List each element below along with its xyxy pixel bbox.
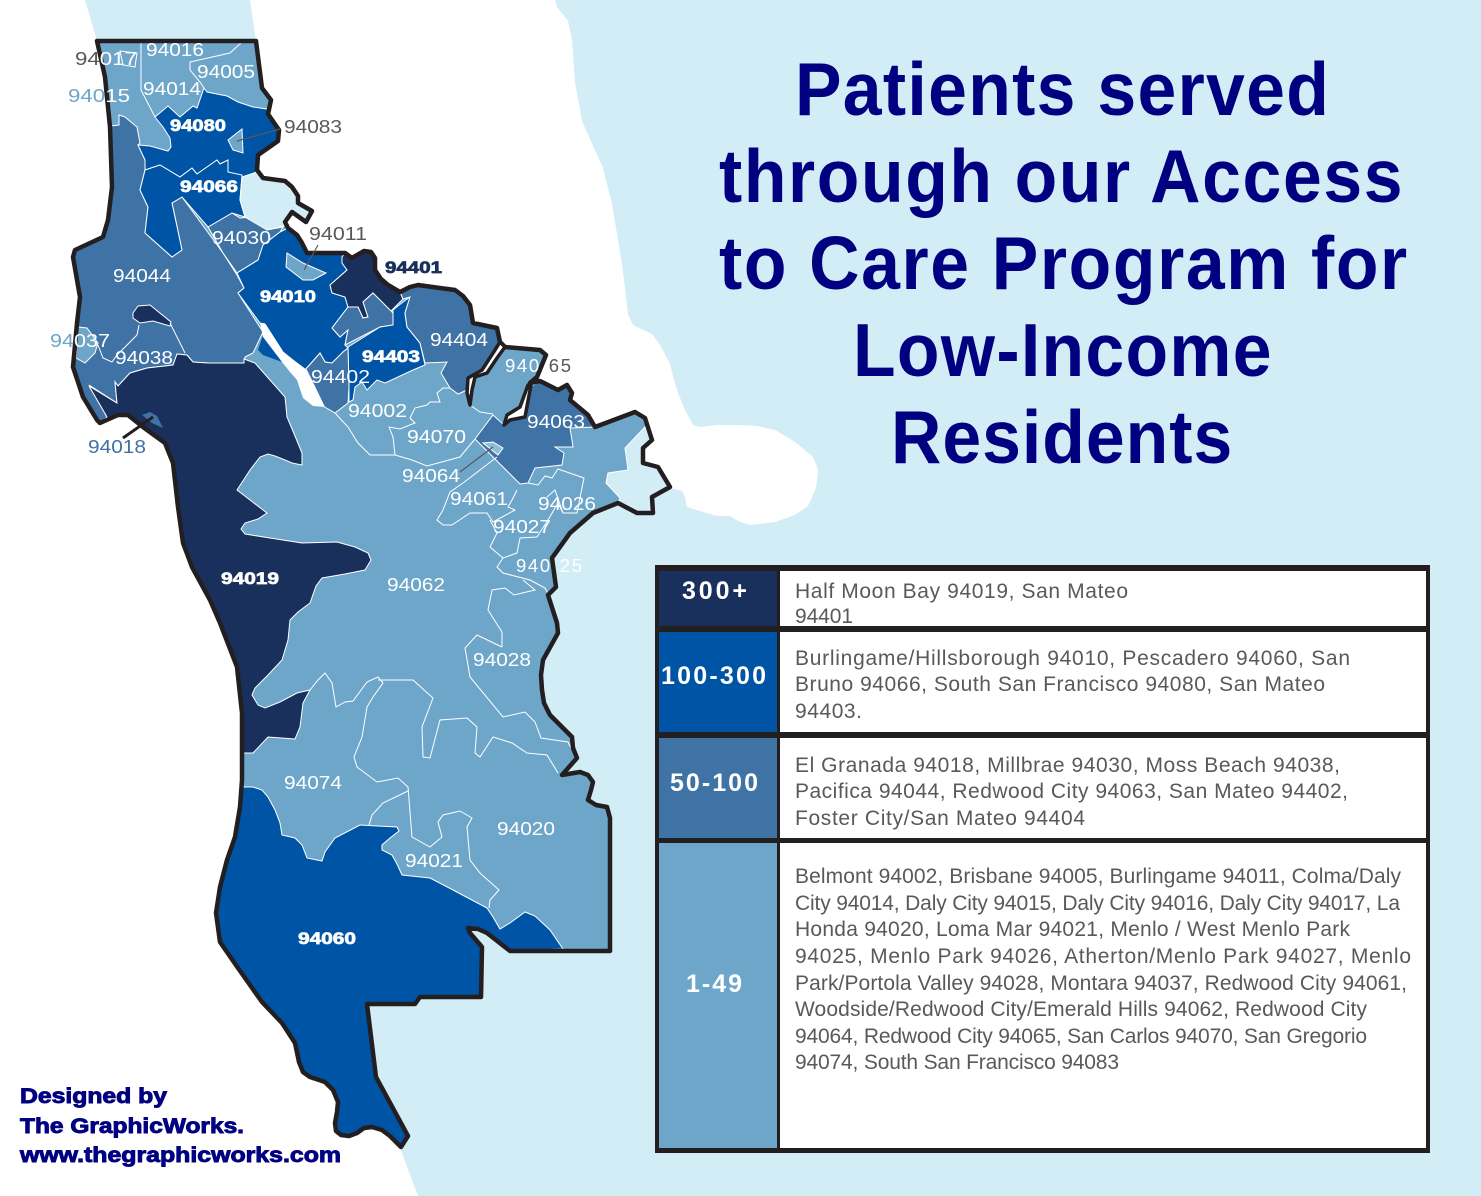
row: 100-300: 100-300 (661, 662, 766, 690)
region 94404, 50-100 (400, 285, 500, 394)
row: 1-49: Park/Portola Valley 94028, Montara 94037, Redwood City 94061, (795, 972, 1407, 995)
zip code labels: 94005 (197, 61, 255, 82)
zip code labels: 940 15 (68, 85, 130, 106)
title (719, 48, 1407, 480)
region 94018 lens (142, 412, 163, 428)
zip code labels: 94014 (143, 78, 201, 99)
leader line 94011 (304, 245, 318, 270)
region 94011 inset (286, 253, 326, 280)
zip code labels: 94019 (221, 569, 279, 588)
row: 300+: Half Moon Bay 94019, San Mateo (795, 580, 1128, 603)
region 94083 inset (228, 129, 243, 153)
zip boundary lines (98, 42, 584, 908)
zip code labels: 94080 (170, 116, 226, 135)
row: 50-100: 50-100 (670, 769, 758, 797)
row: 1-49: 94074, South San Francisco 94083 (795, 1051, 1119, 1074)
row: 300+: 94401 (795, 605, 853, 628)
zip code labels: 94017 (75, 48, 137, 69)
designer credit: www.thegraphicworks.com (19, 1144, 341, 1167)
region 94010, 100-300 (237, 228, 348, 370)
zip code labels: 940 65 (505, 355, 571, 376)
zip code labels: 94403 (362, 347, 420, 366)
region 94063, 50-100 (475, 381, 595, 484)
leader line 94083 (237, 129, 280, 141)
creek sliver between 94404 and 94065 (467, 342, 505, 405)
zip code labels: 94060 (298, 929, 356, 948)
zip code labels: 94026 (538, 493, 596, 514)
zip code labels: 94028 (473, 649, 531, 670)
SFO bay inset (240, 172, 312, 230)
map base: 1-49 patients (73, 41, 670, 1147)
region 94403, 100-300 (348, 297, 425, 402)
zip code labels: 94030 (212, 227, 271, 248)
reservoir stream (260, 323, 325, 407)
zip code labels: 94064 (402, 465, 460, 486)
leader line 94018 (123, 417, 153, 438)
row: 1-49: 1-49 (686, 970, 742, 998)
row: 100-300: Bruno 94066, South San Francisco 94080, San Mateo (795, 673, 1325, 696)
region 94060, 100-300 (216, 787, 563, 1147)
row: 1-49: Woodside/Redwood City/Emerald Hills 94062, Redwood City (795, 998, 1368, 1021)
row: 1-49: 94025, Menlo Park 94026, Atherton/Menlo Park 94027, Menlo (795, 945, 1411, 968)
zip code labels: 94401 (385, 258, 442, 277)
region 94402, 50-100 (305, 348, 349, 413)
title: Residents (891, 396, 1232, 480)
zip code labels: 940 25 (516, 555, 582, 576)
zip code labels: 94044 (113, 265, 171, 286)
title: to Care Program for (719, 222, 1407, 306)
zip code labels: 94011 (309, 223, 367, 244)
map of San Mateo County zip codes (50, 39, 670, 1147)
row: 300+ (659, 571, 1426, 628)
designer credit: The GraphicWorks. (20, 1115, 244, 1138)
row: 300+: 300+ (682, 577, 747, 605)
zip code labels: 94021 (405, 850, 463, 871)
row: 1-49: 94064, Redwood City 94065, San Carlos 94070, San Gregorio (795, 1025, 1367, 1048)
zip code labels: 94038 (115, 347, 173, 368)
designer credit: Designed by (20, 1085, 167, 1108)
region 94401, 300+ (330, 251, 403, 318)
row: 100-300: 94403. (795, 700, 862, 723)
zip code labels: 94020 (497, 818, 555, 839)
region 94044 and coastside, 50-100 (73, 115, 263, 422)
region 94066, 100-300 (140, 160, 245, 257)
title: through our Access (719, 135, 1403, 219)
zip code labels: 94404 (430, 329, 488, 350)
zip code labels: 94063 (527, 411, 585, 432)
row: 1-49 (659, 843, 1426, 1148)
region 94030, 50-100 (208, 213, 283, 273)
title: Low-Income (853, 309, 1272, 393)
row: 50-100: El Granada 94018, Millbrae 94030, Moss Beach 94038, (795, 754, 1340, 777)
zip code labels: 94027 (493, 516, 551, 537)
creek sliver between 94065 and 94063 (504, 385, 531, 425)
zip code labels: 94016 (146, 39, 204, 60)
row: 50-100: Pacifica 94044, Redwood City 94063, San Mateo 94402, (795, 780, 1348, 803)
zip code labels: 94037 (50, 330, 110, 351)
zip code labels: 94061 (450, 488, 508, 509)
zip code labels (50, 39, 596, 948)
title: Patients served (795, 48, 1329, 132)
region block north of 94403, 50-100 (332, 293, 393, 345)
county outline (73, 41, 670, 1147)
zip code labels: 94010 (260, 287, 316, 306)
region 94019, 300+ (89, 354, 371, 753)
zip code labels: 94070 (407, 426, 466, 447)
zip code labels: 94002 (348, 400, 407, 421)
region 94010 southern lobe (258, 335, 282, 362)
row: 50-100: Foster City/San Mateo 94404 (795, 807, 1085, 830)
zip code labels: 94062 (387, 574, 445, 595)
row: 1-49: Belmont 94002, Brisbane 94005, Burlingame 94011, Colma/Daly (795, 865, 1402, 888)
region 94080, 100-300 (138, 88, 279, 177)
designer credit (19, 1085, 341, 1167)
ocean strip north of map (85, 0, 256, 41)
zip code labels: 94402 (311, 366, 370, 387)
row: 1-49: City 94014, Daly City 94015, Daly City 94016, Daly City 94017, La (795, 892, 1400, 915)
row: 1-49: Honda 94020, Loma Mar 94021, Menlo / West Menlo Park (795, 918, 1350, 941)
zip code labels: 94083 (284, 116, 342, 137)
zip code labels: 94018 (88, 436, 146, 457)
navy inset north of 94038 (133, 305, 171, 326)
region 94037, 1-49 (76, 327, 98, 363)
legend table (655, 565, 1430, 1153)
bay water background (367, 0, 1481, 1196)
row: 100-300: Burlingame/Hillsborough 94010, Pescadero 94060, San (795, 647, 1350, 670)
row: 50-100 (659, 738, 1426, 838)
east bay inset (606, 427, 670, 513)
leader line 94064 (460, 447, 493, 472)
zip code labels: 94074 (284, 772, 342, 793)
row: 100-300 (659, 632, 1426, 732)
region 94064 inset (483, 442, 503, 455)
zip code labels: 94066 (180, 177, 238, 196)
